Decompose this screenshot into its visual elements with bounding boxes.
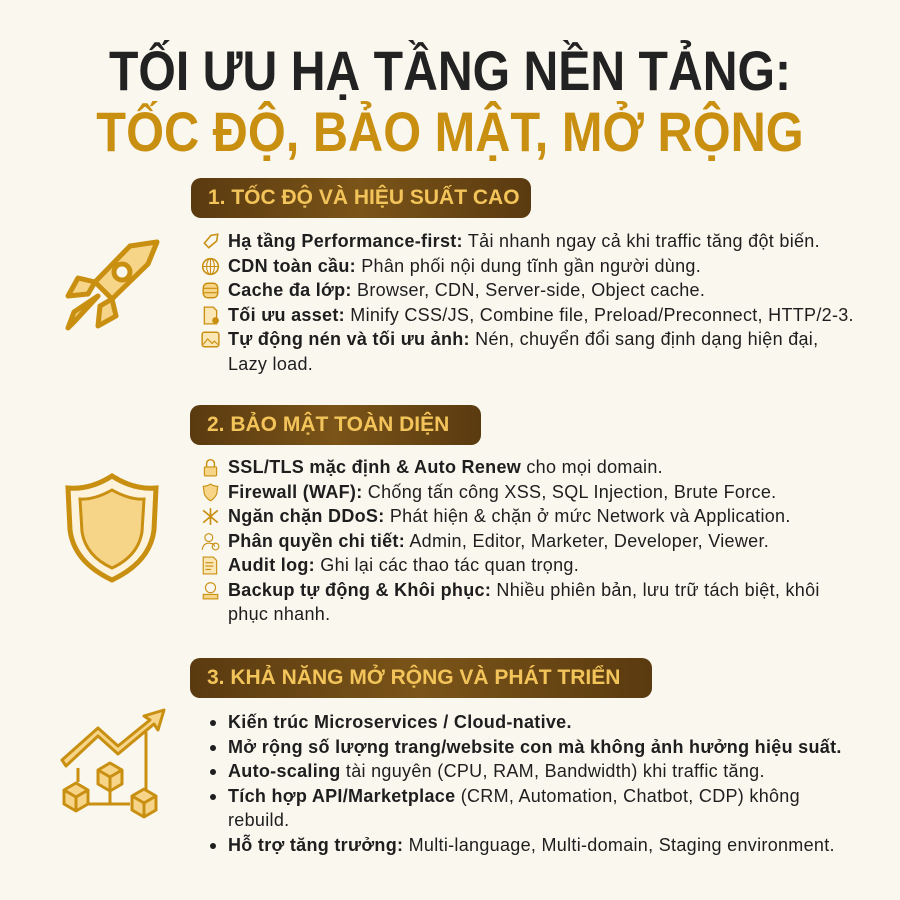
list: section 2 — [202, 457, 820, 624]
list: section 2: Audit log: Ghi lại các thao tác quan trọng. — [228, 555, 579, 575]
list: section 3: Kiến trúc Microservices / Cloud-native. — [228, 712, 572, 732]
icon: growth chart with cubes — [60, 708, 166, 818]
section header 1: 1. TỐC ĐỘ VÀ HIỆU SUẤT CAO — [208, 186, 520, 209]
list: section 1: Tối ưu asset: Minify CSS/JS, Combine file, Preload/Preconnect, HTTP/2-3. — [228, 304, 854, 324]
list: section 2: Ngăn chặn DDoS: Phát hiện & chặn ở mức Network và Application. — [228, 506, 791, 526]
list: section 3: Mở rộng số lượng trang/website con mà không ảnh hưởng hiệu suất. — [228, 736, 842, 756]
list: section 2: Firewall (WAF): Chống tấn công XSS, SQL Injection, Brute Force. — [228, 482, 776, 502]
list: section 2: SSL/TLS mặc định & Auto Renew cho mọi domain. — [228, 457, 663, 477]
title line 2: TỐC ĐỘ, BẢO MẬT, MỞ RỘNG — [96, 100, 804, 163]
section header 2 — [190, 405, 481, 445]
list: section 2: Backup tự động & Khôi phục: Nhiều phiên bản, lưu trữ tách biệt, khôi — [228, 580, 820, 600]
list: section 1: Cache đa lớp: Browser, CDN, Server-side, Object cache. — [228, 280, 705, 300]
icon: shield — [65, 473, 159, 583]
list: section 3: Hỗ trợ tăng trưởng: Multi-language, Multi-domain, Staging environment. — [228, 834, 835, 854]
section header 1 — [191, 178, 531, 218]
list: section 1: Lazy load. — [228, 354, 313, 374]
icon: rocket — [66, 240, 160, 330]
section header 2: 2. BẢO MẬT TOÀN DIỆN — [207, 413, 449, 436]
section header 3 — [190, 658, 652, 698]
list: section 1: Tự động nén và tối ưu ảnh: Nén, chuyển đổi sang định dạng hiện đại, — [228, 329, 818, 349]
list: section 3: rebuild. — [228, 810, 289, 830]
list: section 2: Phân quyền chi tiết: Admin, Editor, Marketer, Developer, Viewer. — [228, 530, 769, 550]
list: section 3 — [210, 712, 842, 855]
list: section 2: phục nhanh. — [228, 604, 330, 624]
title line 1: TỐI ƯU HẠ TẦNG NỀN TẢNG: — [109, 39, 791, 102]
list: section 3: Tích hợp API/Marketplace (CRM, Automation, Chatbot, CDP) không — [228, 786, 800, 806]
list: section 3: Auto-scaling tài nguyên (CPU, RAM, Bandwidth) khi traffic tăng. — [228, 761, 765, 781]
list: section 1 — [201, 231, 854, 374]
list: section 1: Hạ tầng Performance-first: Tải nhanh ngay cả khi traffic tăng đột biến. — [228, 231, 820, 251]
list: section 1: CDN toàn cầu: Phân phối nội dung tĩnh gần người dùng. — [228, 256, 701, 276]
section header 3: 3. KHẢ NĂNG MỞ RỘNG VÀ PHÁT TRIỂN — [207, 666, 620, 689]
